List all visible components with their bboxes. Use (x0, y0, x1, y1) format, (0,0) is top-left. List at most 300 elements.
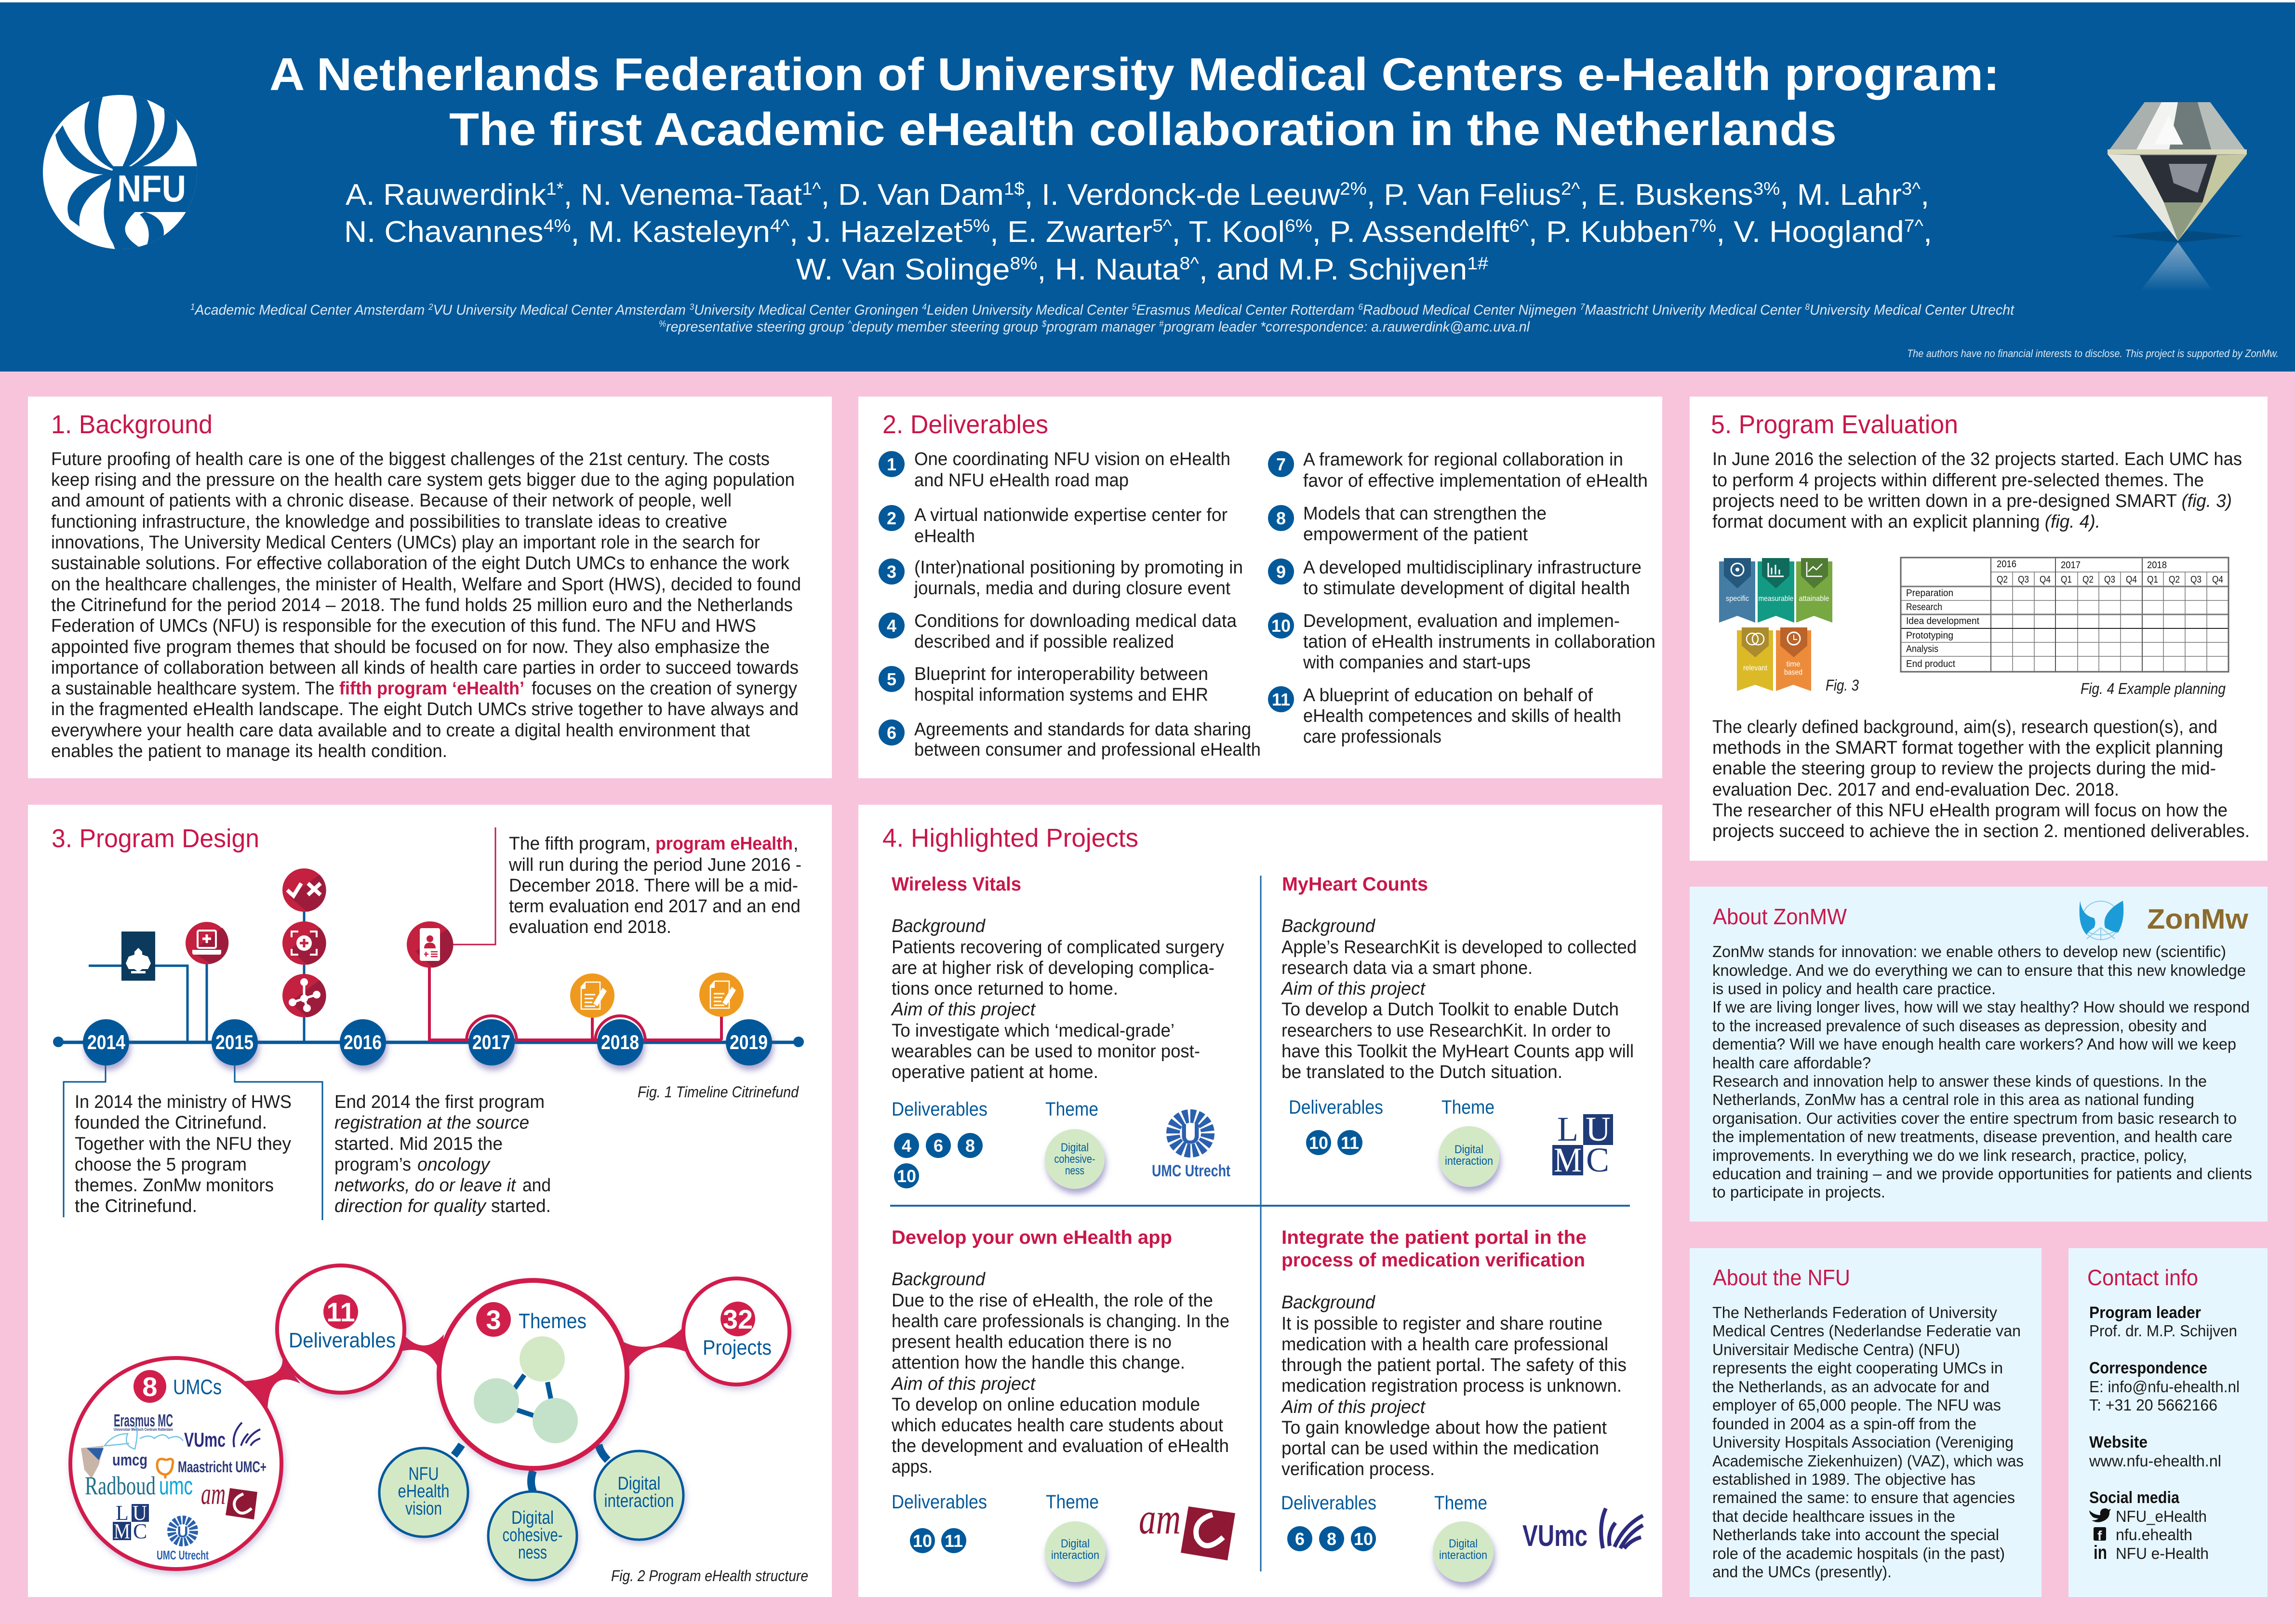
text block: that decide healthcare issues in the (1712, 1507, 1955, 1525)
text block: Academische Ziekenhuizen) (VAZ), which was (1712, 1452, 2024, 1470)
deliverable 10: Development, evaluation and implemen- (1303, 611, 1620, 631)
icon: twitter (2089, 1508, 2111, 1522)
project: Develop your own eHealth app: Aim of this project (891, 1374, 1036, 1394)
logo: Erasmus MC: Erasmus MC (114, 1411, 173, 1430)
deliverable 8: empowerment of the patient (1303, 524, 1528, 545)
text block: importance of collaboration between all kinds of health care parties in order to succeed towards (51, 658, 799, 678)
deliverable 10: 10 (1271, 616, 1291, 636)
logo: LUMC: U (1586, 1110, 1611, 1148)
logo: LUMC: M (1554, 1141, 1582, 1179)
deliverable 9 (1268, 558, 1641, 599)
node: 11 Deliverables: 11 (326, 1297, 355, 1327)
deliverable 4: 4 (887, 616, 896, 636)
logo: VUmc: VUmc (184, 1428, 226, 1451)
timeline chart (53, 827, 804, 1220)
project: Wireless Vitals: 8 (965, 1136, 975, 1156)
logo: amc: am (201, 1477, 226, 1511)
project: Wireless Vitals: Wireless Vitals (892, 874, 1021, 895)
text block: evaluation: enable the steering group to review the projects during the mid- (1712, 759, 2216, 779)
text block (1712, 1304, 2024, 1581)
icon: linkedin: in (2094, 1542, 2107, 1563)
table: example planning: Research (1906, 602, 1942, 612)
logo: Erasmus MC: Universitair Medisch Centrum Rotterdam (114, 1427, 173, 1432)
social media: NFU_eHealth (2116, 1507, 2207, 1525)
deliverable 2: 2 (887, 508, 896, 528)
project: Integrate the patient portal: 10 (1354, 1529, 1373, 1549)
text block: education and training – and we provide opportunities for patients and clients (1712, 1165, 2252, 1183)
node: 3 Themes: Themes (519, 1309, 587, 1333)
year 2015 (212, 1019, 258, 1065)
text: 2014: founded the Citrinefund. (75, 1113, 267, 1133)
deliverable 9: A developed multidisciplinary infrastructure (1303, 558, 1641, 578)
year 2019 (726, 1019, 772, 1065)
logo: UMC Utrecht (1152, 1116, 1230, 1180)
text: 2015: and (522, 1175, 551, 1196)
deliverable 3 (879, 558, 1243, 599)
icon: phone patient (407, 921, 454, 968)
theme badge (1439, 1126, 1499, 1187)
logo: LUMC: C (133, 1519, 147, 1543)
project: MyHeart Counts (1281, 874, 1637, 1187)
theme badge: Digital (1449, 1537, 1478, 1550)
text block: sustainable solutions. For effective collaboration of the eight Dutch UMCs to enhance the work (51, 553, 790, 573)
text: 2014 (75, 1092, 292, 1216)
project: MyHeart Counts: have this Toolkit the MyHeart Counts app will (1281, 1041, 1634, 1062)
authors (344, 178, 1932, 286)
figure: SMART ribbons (1719, 558, 1832, 691)
deliverable 2: eHealth (914, 526, 975, 546)
logo: UMC Utrecht: U (1180, 1118, 1201, 1150)
heading: 4. Highlighted Projects (882, 824, 1138, 852)
logo: umcg (81, 1446, 147, 1478)
project: MyHeart Counts: be translated to the Dutch situation. (1281, 1062, 1562, 1082)
deliverable 6 (879, 719, 1261, 760)
text block: evaluation: The researcher of this NFU eHealth program will focus on how the (1712, 800, 2228, 821)
ribbon: time based: based (1784, 668, 1802, 677)
caption: Fig. 4: Fig. 4 Example planning (2081, 680, 2226, 697)
text block: everywhere your health care data available and to create a digital health environment that (51, 720, 750, 741)
project: MyHeart Counts: Deliverables (1289, 1097, 1383, 1118)
deliverable 2 (879, 505, 1228, 546)
text block: is used in policy and health care practice. (1712, 980, 1996, 998)
deliverable 11: A blueprint of education on behalf of (1303, 685, 1593, 706)
heading: 1. Background (51, 410, 213, 439)
text block: innovations, The University Medical Centers (UMCs) play an important role in the search for (51, 532, 760, 553)
project: Wireless Vitals: Deliverables (892, 1099, 987, 1120)
panel: About the NFU (1690, 1248, 2041, 1597)
panel: About ZonMw (1690, 887, 2268, 1222)
year 2019: 2019 (730, 1031, 768, 1053)
logo: UMC Utrecht (157, 1520, 209, 1562)
deliverable 7 (1268, 450, 1648, 491)
node: 8 UMCs (70, 1358, 281, 1569)
text block: evaluation: projects succeed to achieve the in section 2. mentioned deliverables. (1712, 821, 2250, 841)
project: Wireless Vitals: 6 (934, 1136, 943, 1156)
deliverable 5: Blueprint for interoperability between (914, 664, 1208, 684)
title (269, 49, 2000, 155)
icon: document 2018 (570, 973, 614, 1018)
logo: amc (1139, 1494, 1235, 1560)
text block: intro (1712, 449, 2242, 532)
text block (1712, 943, 2252, 1201)
logo: ZonMw (2080, 901, 2249, 940)
ribbon: measurable: measurable (1758, 595, 1794, 603)
deliverable 1 (879, 449, 1230, 491)
project: Develop your own eHealth app: Deliverables (892, 1491, 987, 1513)
text block: remained the same: to ensure that agencies (1712, 1489, 2015, 1506)
logo: LUMC: M (114, 1519, 130, 1543)
table: example planning: Q4 (2212, 574, 2223, 585)
text block: knowledge. And we do everything we can to ensure that this new knowledge (1712, 961, 2246, 979)
theme badge (1045, 1521, 1106, 1582)
text: fifth program: December 2018. There will be a mid- (509, 876, 798, 896)
text block: health care affordable? (1712, 1054, 1871, 1072)
project: MyHeart Counts: 11 (1341, 1133, 1359, 1153)
deliverable 3: 3 (887, 562, 896, 582)
theme badge: Digital (1061, 1537, 1090, 1550)
heading: 3. Program Design (52, 824, 259, 853)
ribbon: time based (1776, 627, 1811, 691)
text block (51, 449, 801, 761)
node: NFU eHealth vision: eHealth (398, 1481, 449, 1502)
project: Develop your own eHealth app: health care professionals is changing. In the (892, 1311, 1229, 1331)
text block: Research and innovation help to answer these kinds of questions. In the (1712, 1072, 2207, 1090)
project: Develop your own eHealth app: attention how the handle this change. (892, 1353, 1185, 1373)
year 2014 (83, 1019, 129, 1065)
correspondence: Correspondence (2089, 1359, 2207, 1377)
project: MyHeart Counts: researchers to use ResearchKit. In order to (1281, 1021, 1611, 1041)
ribbon: specific: specific (1726, 595, 1749, 603)
deliverable 9: 9 (1276, 562, 1286, 582)
project: MyHeart Counts: 10 (1309, 1133, 1328, 1153)
social media: nfu.ehealth (2116, 1526, 2192, 1544)
heading: About the NFU (1713, 1265, 1850, 1290)
year 2018 (597, 1019, 643, 1065)
heading: 5. Program Evaluation (1711, 410, 1958, 439)
logo: Maastricht UMC+: Maastricht UMC+ (178, 1458, 267, 1476)
table: example planning: 2016 (1997, 559, 2016, 570)
deliverable 10: tation of eHealth instruments in collaboration (1303, 632, 1655, 652)
node: 3 Themes: 3 (486, 1305, 501, 1335)
ribbon: attainable (1796, 558, 1832, 623)
text block: the implementation of new treatments, disease prevention, and health care (1712, 1128, 2232, 1145)
affiliations (190, 302, 2015, 335)
text block: fifth program ‘eHealth’ (339, 679, 524, 699)
panel: 4. Highlighted Projects (858, 805, 1662, 1597)
logo: amc: am (1139, 1494, 1181, 1543)
program leader: Program leader (2089, 1304, 2201, 1322)
text: 2015: direction for quality (334, 1196, 487, 1216)
project: Wireless Vitals: Patients recovering of complicated surgery (892, 937, 1224, 958)
social media: Social media (2089, 1489, 2180, 1507)
project: Wireless Vitals: Theme (1045, 1099, 1098, 1120)
project: Integrate the patient portal: Integrate the patient portal in the (1281, 1227, 1587, 1248)
deliverable 5: hospital information systems and EHR (914, 685, 1208, 705)
text block: functioning infrastructure, the knowledge and possibilities to translate ideas to creative (51, 512, 727, 532)
affiliations: 1Academic Medical Center Amsterdam 2VU University Medical Center Amsterdam 3University Medical Center Groningen 4Leiden University Medical Center 5Erasmus Medical Center Rotterdam 6Radboud Medical Center Nijmegen 7Maastricht Univerity Medical Center 8University Medical Center Utrecht (190, 302, 2015, 318)
project: Develop your own eHealth app: To develop on online education module (892, 1395, 1200, 1415)
theme badge: interaction (1051, 1549, 1099, 1562)
year 2016 (340, 1019, 386, 1065)
theme badge: cohesive- (1054, 1153, 1095, 1166)
project: Wireless Vitals: 4 (902, 1136, 911, 1156)
project: Integrate the patient portal: medication with a health care professional (1281, 1334, 1608, 1355)
text block: keep rising and the pressure on the health care system gets bigger due to the aging population (51, 470, 795, 490)
text: 2015 (334, 1092, 551, 1216)
deliverable 4 (879, 611, 1237, 652)
project: Integrate the patient portal: process of medication verification (1281, 1250, 1585, 1271)
logo: NFU: NFU (117, 167, 186, 210)
project: Wireless Vitals: To investigate which ‘medical-grade’ (892, 1021, 1174, 1041)
project: Integrate the patient portal: medication registration process is unknown. (1281, 1376, 1622, 1396)
text block: focuses on the creation of synergy (532, 679, 797, 699)
text block: ZonMw stands for innovation: we enable others to develop new (scientific) (1712, 943, 2226, 960)
text block: the Netherlands, as an advocate for and (1712, 1378, 1989, 1396)
icon: laptop (186, 922, 228, 964)
authors: A. Rauwerdink 1*, N. Venema-Taat 1^, D. Van Dam 1$, I. Verdonck-de Leeuw 2%, P. Van Felius 2^, E. Buskens 3%, M. Lahr3^, (346, 178, 1929, 212)
year 2017 (468, 1019, 515, 1065)
icon: check and cross (282, 868, 326, 912)
text: 2014: the Citrinefund. (75, 1196, 197, 1216)
project: Integrate the patient portal: 6 (1295, 1529, 1305, 1549)
caption: Fig. 1: Fig. 1 Timeline Citrinefund (638, 1083, 799, 1101)
text: fifth program: will run during the period June 2016 - (508, 855, 801, 875)
table: example planning: Analysis (1906, 644, 1938, 654)
project: MyHeart Counts: To develop a Dutch Toolkit to enable Dutch (1281, 999, 1619, 1020)
text block: Netherlands, ZonMw has a central role in this area as national funding (1712, 1091, 2194, 1108)
text: 2015: End 2014 the first program (334, 1092, 545, 1112)
node: 32 Projects: 32 (723, 1304, 753, 1334)
panel: 1. Background (28, 397, 832, 778)
authors: W. Van Solinge 8%, H. Nauta 8^, and M.P. Schijven 1# (796, 253, 1488, 286)
deliverable 11 (1268, 685, 1621, 747)
ribbon: relevant: relevant (1743, 664, 1767, 672)
project: Develop your own eHealth app: 11 (945, 1531, 963, 1551)
node: Digital cohesiveness: cohesive- (502, 1525, 563, 1545)
node: 11 Deliverables: Deliverables (289, 1329, 396, 1352)
deliverable 8 (1268, 504, 1547, 545)
project: MyHeart Counts: Background (1281, 916, 1376, 936)
affiliations: %representative steering group ^deputy member steering group $program manager #program leader *correspondence: a.rauwerdink@amc.uva.nl (659, 319, 1530, 335)
logo: NFU (43, 89, 202, 251)
deliverable 3: (Inter)national positioning by promoting in (914, 558, 1243, 578)
deliverable 6: Agreements and standards for data sharing (914, 719, 1251, 740)
year 2014: 2014 (87, 1031, 126, 1053)
table: example planning: Q3 (2190, 574, 2202, 585)
node: 11 Deliverables (277, 1265, 404, 1393)
deliverable 11: care professionals (1303, 727, 1441, 747)
deliverable 3: journals, media and during closure event (914, 578, 1230, 599)
authors: N. Chavannes 4%, M. Kasteleyn 4^, J. Hazelzet 5%, E. Zwarter 5^, T. Kool 6%, P. Assendelft 6^, P. Kubben 7%, V. Hoogland 7^, (344, 215, 1932, 249)
deliverable 2: A virtual nationwide expertise center for (914, 505, 1228, 525)
project: Wireless Vitals (891, 874, 1230, 1189)
logo: LUMC: U (133, 1501, 147, 1525)
project: Integrate the patient portal: Deliverables (1281, 1492, 1376, 1514)
node: NFU eHealth vision: NFU (409, 1464, 439, 1484)
table: example planning: Prototyping (1906, 630, 1953, 641)
text block: employer of 65,000 people. The NFU was (1712, 1396, 2001, 1414)
table: example planning: Q3 (2018, 574, 2029, 585)
logo: Radboud umc: umc (159, 1472, 193, 1500)
social media: NFU e-Health (2116, 1544, 2209, 1562)
icon: focus cross (282, 921, 326, 965)
text block: represents the eight cooperating UMCs in (1712, 1359, 2003, 1377)
website (2089, 1433, 2221, 1470)
panel: 3. Program Design (28, 805, 832, 1597)
text: 2015: program’s (334, 1155, 411, 1175)
project: Wireless Vitals: 10 (897, 1166, 916, 1186)
node: Digital interaction: Digital (618, 1474, 660, 1494)
project: Wireless Vitals: are at higher risk of developing complica- (892, 958, 1214, 978)
text block: in the fragmented eHealth landscape. The eight Dutch UMCs strive together to have always and (51, 699, 799, 719)
deliverable 6: 6 (887, 723, 896, 743)
text block: intro: format document with an explicit planning (fig. 4). (1712, 512, 2100, 532)
project: Integrate the patient portal: To gain knowledge about how the patient (1281, 1418, 1607, 1438)
deliverable 8: 8 (1276, 508, 1286, 528)
text block: intro: In June 2016 the selection of the 32 projects started. Each UMC has (1712, 449, 2242, 469)
logo: amc (201, 1477, 257, 1519)
table: example planning: Idea development (1906, 616, 1979, 626)
project: MyHeart Counts: research data via a smart phone. (1281, 958, 1533, 978)
project: Develop your own eHealth app: the development and evaluation of eHealth (892, 1436, 1229, 1456)
text block: Future proofing of health care is one of the biggest challenges of the 21st century. The costs (51, 449, 770, 469)
ribbon: relevant (1737, 627, 1773, 691)
text block: Medical Centres (Nederlandse Federatie van (1712, 1322, 2021, 1340)
logo: LUMC (1552, 1110, 1613, 1179)
ribbon: specific (1719, 558, 1755, 623)
text block: evaluation: evaluation Dec. 2017 and end-evaluation Dec. 2018. (1712, 780, 2119, 800)
text block: Federation of UMCs (NFU) is responsible for the execution of this fund. The NFU and HWS (51, 616, 756, 636)
project: MyHeart Counts: MyHeart Counts (1282, 874, 1428, 895)
title: The first Academic eHealth collaboration in the Netherlands (449, 104, 1837, 155)
text block: and amount of patients with a chronic disease. Because of their network of people, well (51, 491, 732, 511)
heading: 2. Deliverables (882, 410, 1048, 439)
project: Integrate the patient portal: portal can be used within the medication (1281, 1438, 1599, 1459)
logo: Maastricht UMC+ (157, 1458, 267, 1478)
table: example planning: 2017 (2061, 560, 2081, 571)
panel: 5. Program Evaluation (1690, 397, 2268, 861)
table: example planning: Q1 (2061, 574, 2072, 585)
project: Wireless Vitals: operative patient at home. (892, 1062, 1098, 1082)
project: MyHeart Counts: Apple’s ResearchKit is developed to collected (1281, 937, 1637, 958)
node: 32 Projects (683, 1278, 789, 1384)
text: 2015: oncology (417, 1155, 491, 1175)
deliverable 9: to stimulate development of digital health (1303, 578, 1630, 599)
table: example planning: Q1 (2147, 574, 2158, 585)
text: fifth program: evaluation end 2018. (509, 917, 671, 937)
table: example planning: 2018 (2147, 560, 2167, 571)
text block: Universitair Medische Centra) (NFU) (1712, 1341, 1960, 1358)
text block: The Netherlands Federation of University (1712, 1304, 1997, 1321)
logo: UMC Utrecht: U (177, 1523, 188, 1541)
icon: diamond (2108, 102, 2247, 292)
heading: Contact info (2087, 1265, 2198, 1290)
node: Digital interaction: interaction (604, 1491, 674, 1511)
project: Develop your own eHealth app: Theme (1046, 1491, 1099, 1513)
text block: University Hospitals Association (Vereniging (1712, 1433, 2014, 1451)
table: example planning: End product (1906, 659, 1955, 669)
node: 8 UMCs: UMCs (173, 1375, 222, 1399)
project: Wireless Vitals: tions once returned to home. (892, 979, 1118, 999)
text block: intro: to perform 4 projects within different pre-selected themes. The (1712, 470, 2204, 491)
text block: evaluation: The clearly defined background, aim(s), research question(s), and (1712, 717, 2217, 737)
text block: a sustainable healthcare system. The (51, 679, 334, 699)
website: www.nfu-ehealth.nl (2089, 1452, 2221, 1470)
theme badge (1433, 1521, 1494, 1582)
text block: appointed five program themes that should be focused on for now. They also emphasize the (51, 637, 770, 657)
table: example planning: Q2 (1997, 574, 2008, 585)
chart: program structure (70, 1265, 789, 1580)
text block: dementia? Will we have enough health care workers? And how will we keep (1712, 1035, 2236, 1053)
node: Digital cohesiveness (488, 1491, 577, 1580)
text block: If we are living longer lives, how will we stay healthy? How should we respond (1712, 998, 2250, 1016)
logo: VUmc: VUmc (1522, 1519, 1588, 1553)
node: Digital cohesiveness: Digital (511, 1508, 554, 1528)
correspondence: E: info@nfu-ehealth.nl (2089, 1378, 2240, 1396)
table: example planning: Q4 (2126, 574, 2137, 585)
social media (2089, 1489, 2209, 1563)
deliverable 11: 11 (1272, 690, 1290, 709)
project: Integrate the patient portal: verification process. (1281, 1459, 1435, 1479)
text: fifth program: term evaluation end 2017 and an end (509, 896, 801, 917)
logo: Radboud umc: Radboud (85, 1471, 156, 1500)
caption: Fig. 3: Fig. 3 (1826, 677, 1859, 694)
theme badge: interaction (1445, 1155, 1493, 1168)
project: Develop your own eHealth app: which educates health care students about (891, 1415, 1223, 1436)
text: 2015: started. (491, 1196, 551, 1216)
icon: facebook: f (2097, 1528, 2102, 1543)
node: NFU eHealth vision (379, 1448, 468, 1537)
text block: evaluation (1712, 717, 2250, 841)
deliverable 4: described and if possible realized (914, 632, 1174, 652)
logo: VUmc (1522, 1508, 1643, 1553)
theme badge (1045, 1129, 1105, 1189)
deliverable 4: Conditions for downloading medical data (914, 611, 1237, 631)
table: example planning: Q4 (2040, 574, 2051, 585)
project: Develop your own eHealth app: apps. (892, 1457, 933, 1477)
deliverable 10: with companies and start-ups (1303, 652, 1531, 673)
project: Integrate the patient portal: Aim of this project (1281, 1397, 1426, 1417)
text: fifth program: , (793, 834, 799, 854)
deliverable 7: favor of effective implementation of eHealth (1303, 471, 1648, 491)
text: 2015: started. Mid 2015 the (334, 1134, 503, 1154)
year 2015: 2015 (215, 1031, 254, 1053)
text: 2014: choose the 5 program (75, 1155, 247, 1175)
text block: the Citrinefund for the period 2014 – 2018. The fund holds 25 million euro and the Netherlands (51, 595, 793, 615)
logo: UMC Utrecht: UMC Utrecht (1152, 1162, 1230, 1180)
table: example planning: Preparation (1906, 588, 1953, 599)
project: Develop your own eHealth app: present health education there is no (892, 1332, 1172, 1352)
ribbon: measurable (1758, 558, 1794, 623)
text block: to the increased prevalence of such diseases as depression, obesity and (1712, 1017, 2207, 1035)
correspondence (2089, 1359, 2240, 1414)
project: Integrate the patient portal: Background (1281, 1292, 1376, 1313)
text: 2015: networks, do or leave it (334, 1175, 516, 1196)
project: Develop your own eHealth app (891, 1227, 1235, 1582)
text: 2014: In 2014 the ministry of HWS (75, 1092, 292, 1112)
table: example planning (1901, 558, 2228, 672)
text block: evaluation: methods in the SMART format together with the explicit planning (1712, 738, 2223, 758)
deliverable 5: 5 (887, 669, 896, 689)
header banner (0, 2, 2295, 372)
theme badge: Digital (1061, 1141, 1089, 1154)
text: fifth program (508, 834, 801, 937)
logo: UMC Utrecht: UMC Utrecht (157, 1548, 209, 1562)
node: Digital cohesiveness: ness (518, 1543, 547, 1563)
text block: and the UMCs (presently). (1712, 1563, 1892, 1581)
text block: enables the patient to manage its health condition. (51, 741, 447, 761)
project: Develop your own eHealth app: Due to the rise of eHealth, the role of the (892, 1291, 1213, 1311)
